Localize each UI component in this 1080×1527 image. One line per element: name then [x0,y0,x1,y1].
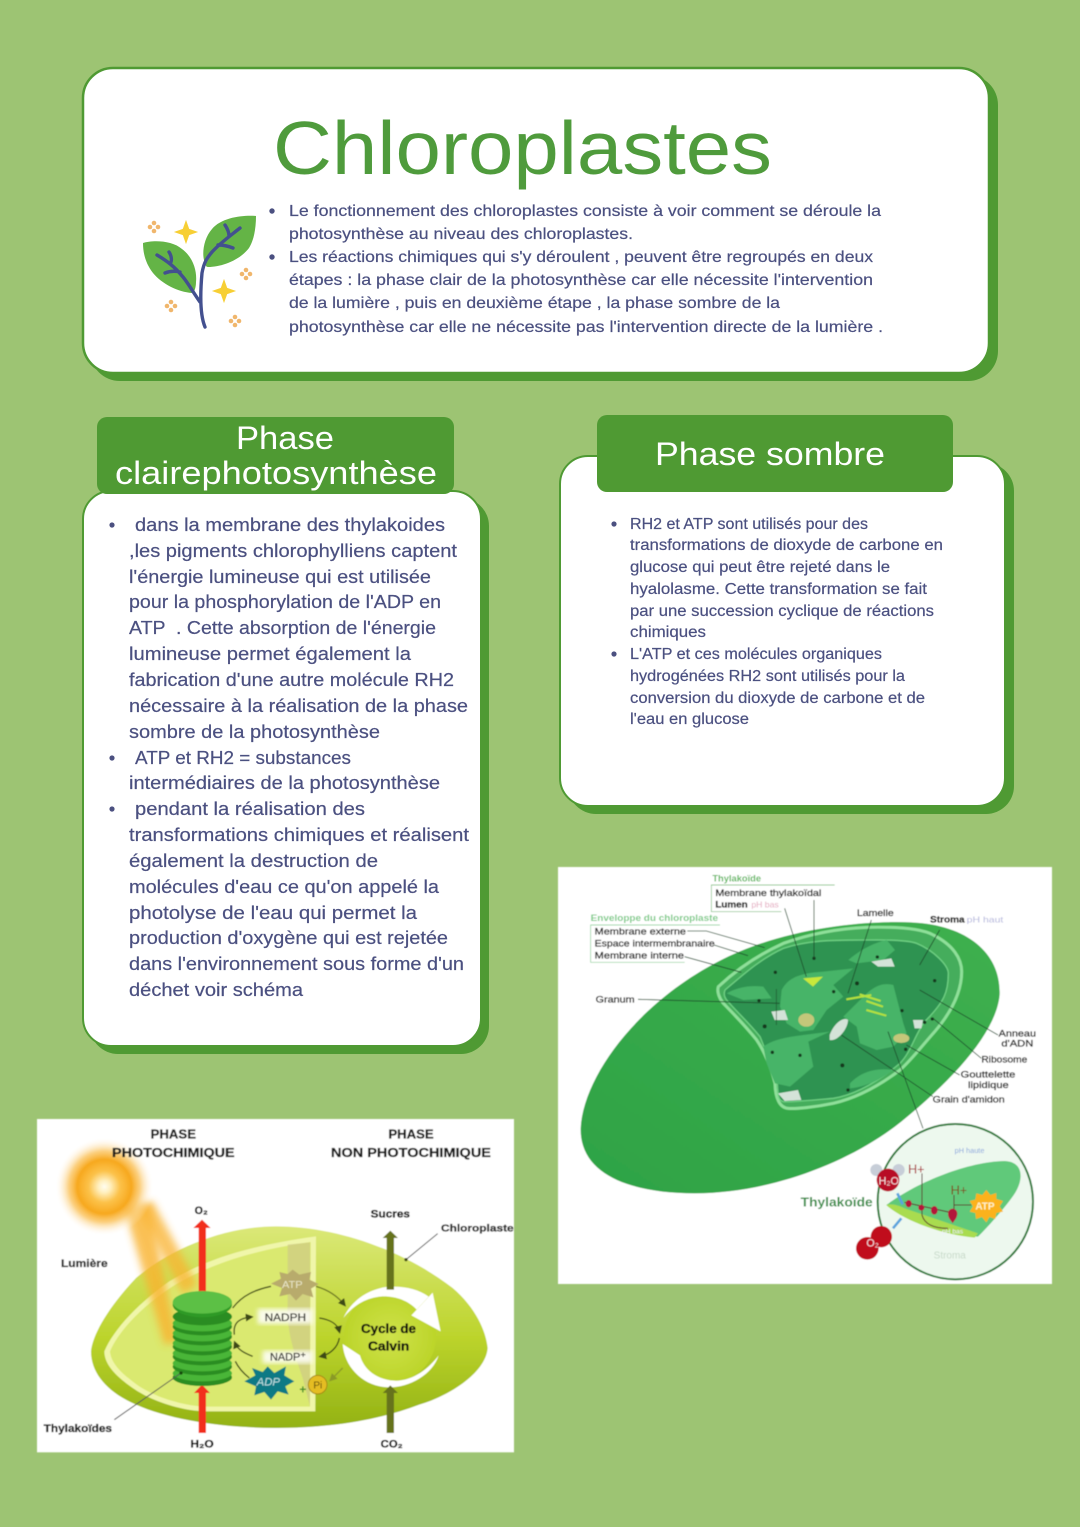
heading labels [112,1127,491,1160]
thylakoid stacks [727,940,936,1101]
text block: phase claire: molécules d'eau ce qu'on appelé la [129,877,440,897]
text block: phase claire: lumineuse permet également la [129,644,412,664]
text block: phase claire: l'énergie lumineuse qui est utilisée [129,567,431,587]
ATP and ADP bursts: ADP [256,1376,281,1388]
labels: structures: d'ADN [1001,1039,1033,1049]
labels: structures: Granum [596,994,635,1004]
text block: phase claire: production d'oxygène qui est rejetée [129,928,448,948]
labels: thylakoide box: Membrane thylakoïdal [715,888,821,898]
text block: phase sombre: conversion du dioxyde de carbone et de [630,690,925,707]
inset: thylakoid detail: H+ [908,1162,925,1176]
text block: phase sombre: chimiques [630,624,706,641]
arrows: sugars, carbon dioxide [383,1231,398,1433]
text block: phase sombre: hyalolasme. Cette transformation se fait [630,581,928,598]
Pi molecule: Pi [313,1381,322,1392]
text block: phase claire: également la destruction de [129,851,378,871]
text block: phase sombre: transformations de dioxyde de carbone en [630,537,943,554]
heading: phase sombre: Phase sombre [655,436,885,472]
text block: phase claire: pour la phosphorylation de l'ADP en [129,592,441,612]
text block: phase claire: pendant la réalisation des [135,799,365,819]
labels: thylakoide box [711,874,835,912]
text block: phase claire: dans l'environnement sous forme d'un [129,954,464,974]
heading: phase claire: Phase [236,420,334,456]
text block: phase claire: fabrication d'une autre molécule RH2 [129,670,454,690]
inset: thylakoid detail [801,1124,1033,1279]
text block: introduction: photosynthèse au niveau des chloroplastes. [289,226,633,243]
ATP and ADP bursts [244,1270,319,1400]
panel: phase claire [83,417,489,1054]
text block: phase sombre: glucose qui peut être rejeté dans le [630,559,890,576]
calvin cycle [343,1287,441,1387]
heading labels: NON PHOTOCHIMIQUE [331,1145,491,1160]
heading: phase claire [97,417,454,494]
labels and leaders: Sucres [371,1208,410,1220]
title: Chloroplastes [273,106,772,190]
inset: thylakoid detail: Stroma [934,1250,966,1261]
inset: thylakoid detail: H₂O [879,1175,899,1187]
labels: structures: lipidique [968,1080,1009,1090]
text block: phase claire: transformations chimiques et réalisent [129,825,469,845]
inset: thylakoid detail: pH haute [955,1146,984,1155]
chloroplast body [581,922,1000,1193]
labels and leaders [44,1205,514,1450]
labels: envelope box: Membrane interne [595,950,684,960]
text block: phase claire: sombre de la photosynthèse [129,722,380,742]
leader lines [638,900,998,1128]
text block: introduction [269,203,883,336]
text block: phase claire: déchet voir schéma [129,980,304,1000]
panel: phase sombre [560,415,1014,814]
text block: phase claire: nécessaire à la réalisation de la phase [129,696,468,716]
panel: introduction [83,68,998,381]
heading labels: PHASE [151,1127,196,1142]
text block: phase sombre: par une succession cyclique de réactions [630,603,934,620]
text block: phase sombre [611,516,943,728]
text block: phase sombre: hydrogénées RH2 sont utilisés pour la [630,668,905,685]
text block: phase claire: photolyse de l'eau qui permet la [129,903,418,923]
NADPH and NADP labels: NADPH [265,1312,306,1324]
labels: envelope box: Enveloppe du chloroplaste [591,913,718,923]
labels: structures: Stroma [930,915,966,925]
NADPH and NADP labels [258,1309,313,1364]
labels: structures: Anneau [999,1029,1036,1039]
calvin cycle: Calvin [368,1340,409,1354]
heading labels: PHASE [388,1127,434,1142]
labels: structures: Lamelle [857,908,894,918]
sun and rays [55,1137,198,1345]
labels: structures: Ribosome [981,1054,1027,1064]
text block: introduction: photosynthèse car elle ne nécessite pas l'intervention directe de la lumière . [289,319,883,336]
labels: structures: pH haut [967,915,1004,925]
ATP and ADP bursts: ATP [282,1280,303,1291]
labels: envelope box: Espace intermembranaire [595,939,715,949]
text block: phase sombre: L'ATP et ces molécules organiques [630,646,882,663]
text block: phase claire: dans la membrane des thylakoides [135,515,445,535]
icon: plant with sparkles [143,216,256,327]
diagram: chloroplast structure [558,867,1052,1284]
Pi molecule: + [299,1382,306,1396]
NADPH and NADP labels: NADP⁺ [270,1352,306,1364]
labels and leaders: CO₂ [381,1438,403,1450]
text block: phase claire: ATP . Cette absorption de l'énergie [129,618,436,638]
labels: structures: Grain d'amidon [933,1095,1005,1105]
inset: thylakoid detail: O₂ [866,1238,879,1250]
text block: phase claire [109,515,469,1000]
labels and leaders: Thylakoïdes [44,1423,112,1435]
cycle arrows [233,1286,344,1380]
chloroplast body [91,1226,488,1428]
text block: phase claire: ,les pigments chlorophylliens captent [129,541,457,561]
labels and leaders: O₂ [195,1205,208,1217]
diagram: photosynthesis phases [37,1119,514,1452]
inset: thylakoid detail: H+ [951,1183,967,1197]
text block: introduction: Le fonctionnement des chloroplastes consiste à voir comment se déroule la [289,203,881,220]
labels and leaders: H₂O [190,1438,214,1450]
labels: thylakoide box: Thylakoïde [712,874,761,884]
labels: envelope box [591,913,720,962]
text block: introduction: étapes : la phase clair de la photosynthèse car elle nécessite l'intervention [289,272,873,289]
inset: thylakoid detail: Thylakoïde [801,1195,873,1210]
text block: phase sombre: RH2 et ATP sont utilisés pour des [630,516,868,533]
heading labels: PHOTOCHIMIQUE [112,1145,235,1160]
text block: introduction: de la lumière , puis en deuxième étape , la phase sombre de la [289,295,780,312]
thylakoid stack [173,1291,232,1386]
heading: phase claire: clairephotosynthèse [115,455,437,491]
text block: phase claire: ATP et RH2 = substances [135,748,351,768]
labels: thylakoide box: pH bas [751,900,779,910]
text block: phase sombre: l'eau en glucose [630,711,749,728]
heading: phase sombre [597,415,953,492]
text block: phase claire: intermédiaires de la photosynthèse [129,773,440,793]
labels: structures [596,908,1036,1105]
labels and leaders: Lumière [61,1258,108,1270]
labels and leaders: Chloroplaste [441,1223,514,1234]
inset: thylakoid detail: ATP [975,1202,995,1213]
labels: thylakoide box: Lumen [715,900,748,910]
Pi molecule [299,1375,327,1396]
inset: thylakoid detail: pH bas [942,1229,964,1236]
text block: introduction: Les réactions chimiques qui s'y déroulent , peuvent être regroupés en deux [289,249,873,266]
arrows: water, oxygen [193,1220,211,1433]
labels: envelope box: Membrane externe [595,927,686,937]
calvin cycle: Cycle de [361,1322,416,1336]
labels: structures: Gouttelette [961,1069,1015,1079]
